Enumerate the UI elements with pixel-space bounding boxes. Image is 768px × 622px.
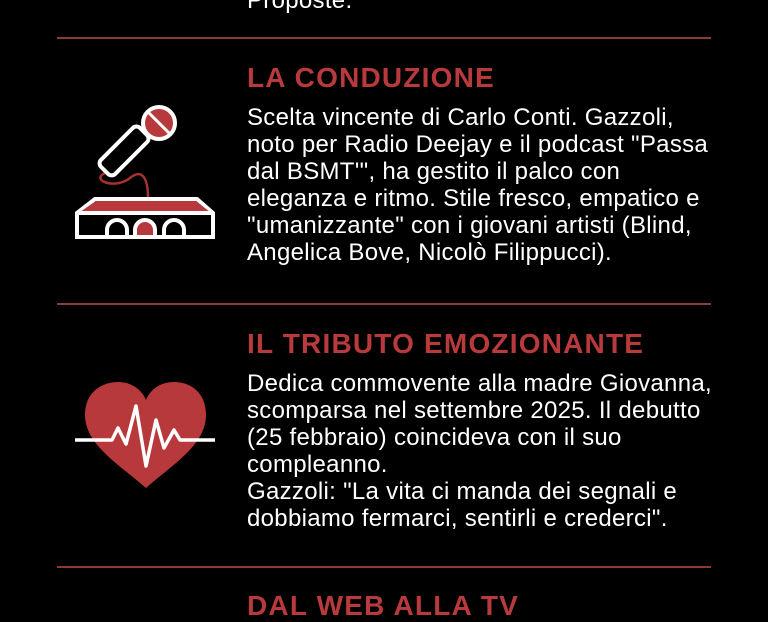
text: tributo: compleanno. [247, 451, 388, 478]
icon: microphone stage [75, 105, 215, 239]
heading: la conduzione: LA CONDUZIONE [247, 62, 495, 93]
text: conduzione [247, 104, 708, 266]
text: conduzione: dal BSMT'", ha gestito il palco con [247, 158, 620, 185]
text: tributo: Gazzoli: "La vita ci manda dei segnali e [247, 478, 677, 505]
text: tributo: dobbiamo fermarci, sentirli e crederci". [247, 505, 668, 532]
text: tributo [247, 370, 712, 532]
text: conduzione: noto per Radio Deejay e il podcast "Passa [247, 131, 708, 158]
text: tributo: Dedica commovente alla madre Giovanna, [247, 370, 712, 397]
icon: heart with heartbeat [75, 382, 215, 488]
text: conduzione: Angelica Bove, Nicolò Filippucci). [247, 239, 612, 266]
text: tributo: (25 febbraio) coincideva con il suo [247, 424, 622, 451]
text: conduzione: eleganza e ritmo. Stile fresco, empatico e [247, 185, 700, 212]
text: tributo: scomparsa nel settembre 2025. Il debutto [247, 397, 701, 424]
text: conduzione: "umanizzante" con i giovani artisti (Blind, [247, 212, 692, 239]
heading: dal web alla tv: DAL WEB ALLA TV [247, 590, 519, 621]
text: conduzione: Scelta vincente di Carlo Conti. Gazzoli, [247, 104, 674, 131]
heading: il tributo: IL TRIBUTO EMOZIONANTE [247, 328, 644, 359]
